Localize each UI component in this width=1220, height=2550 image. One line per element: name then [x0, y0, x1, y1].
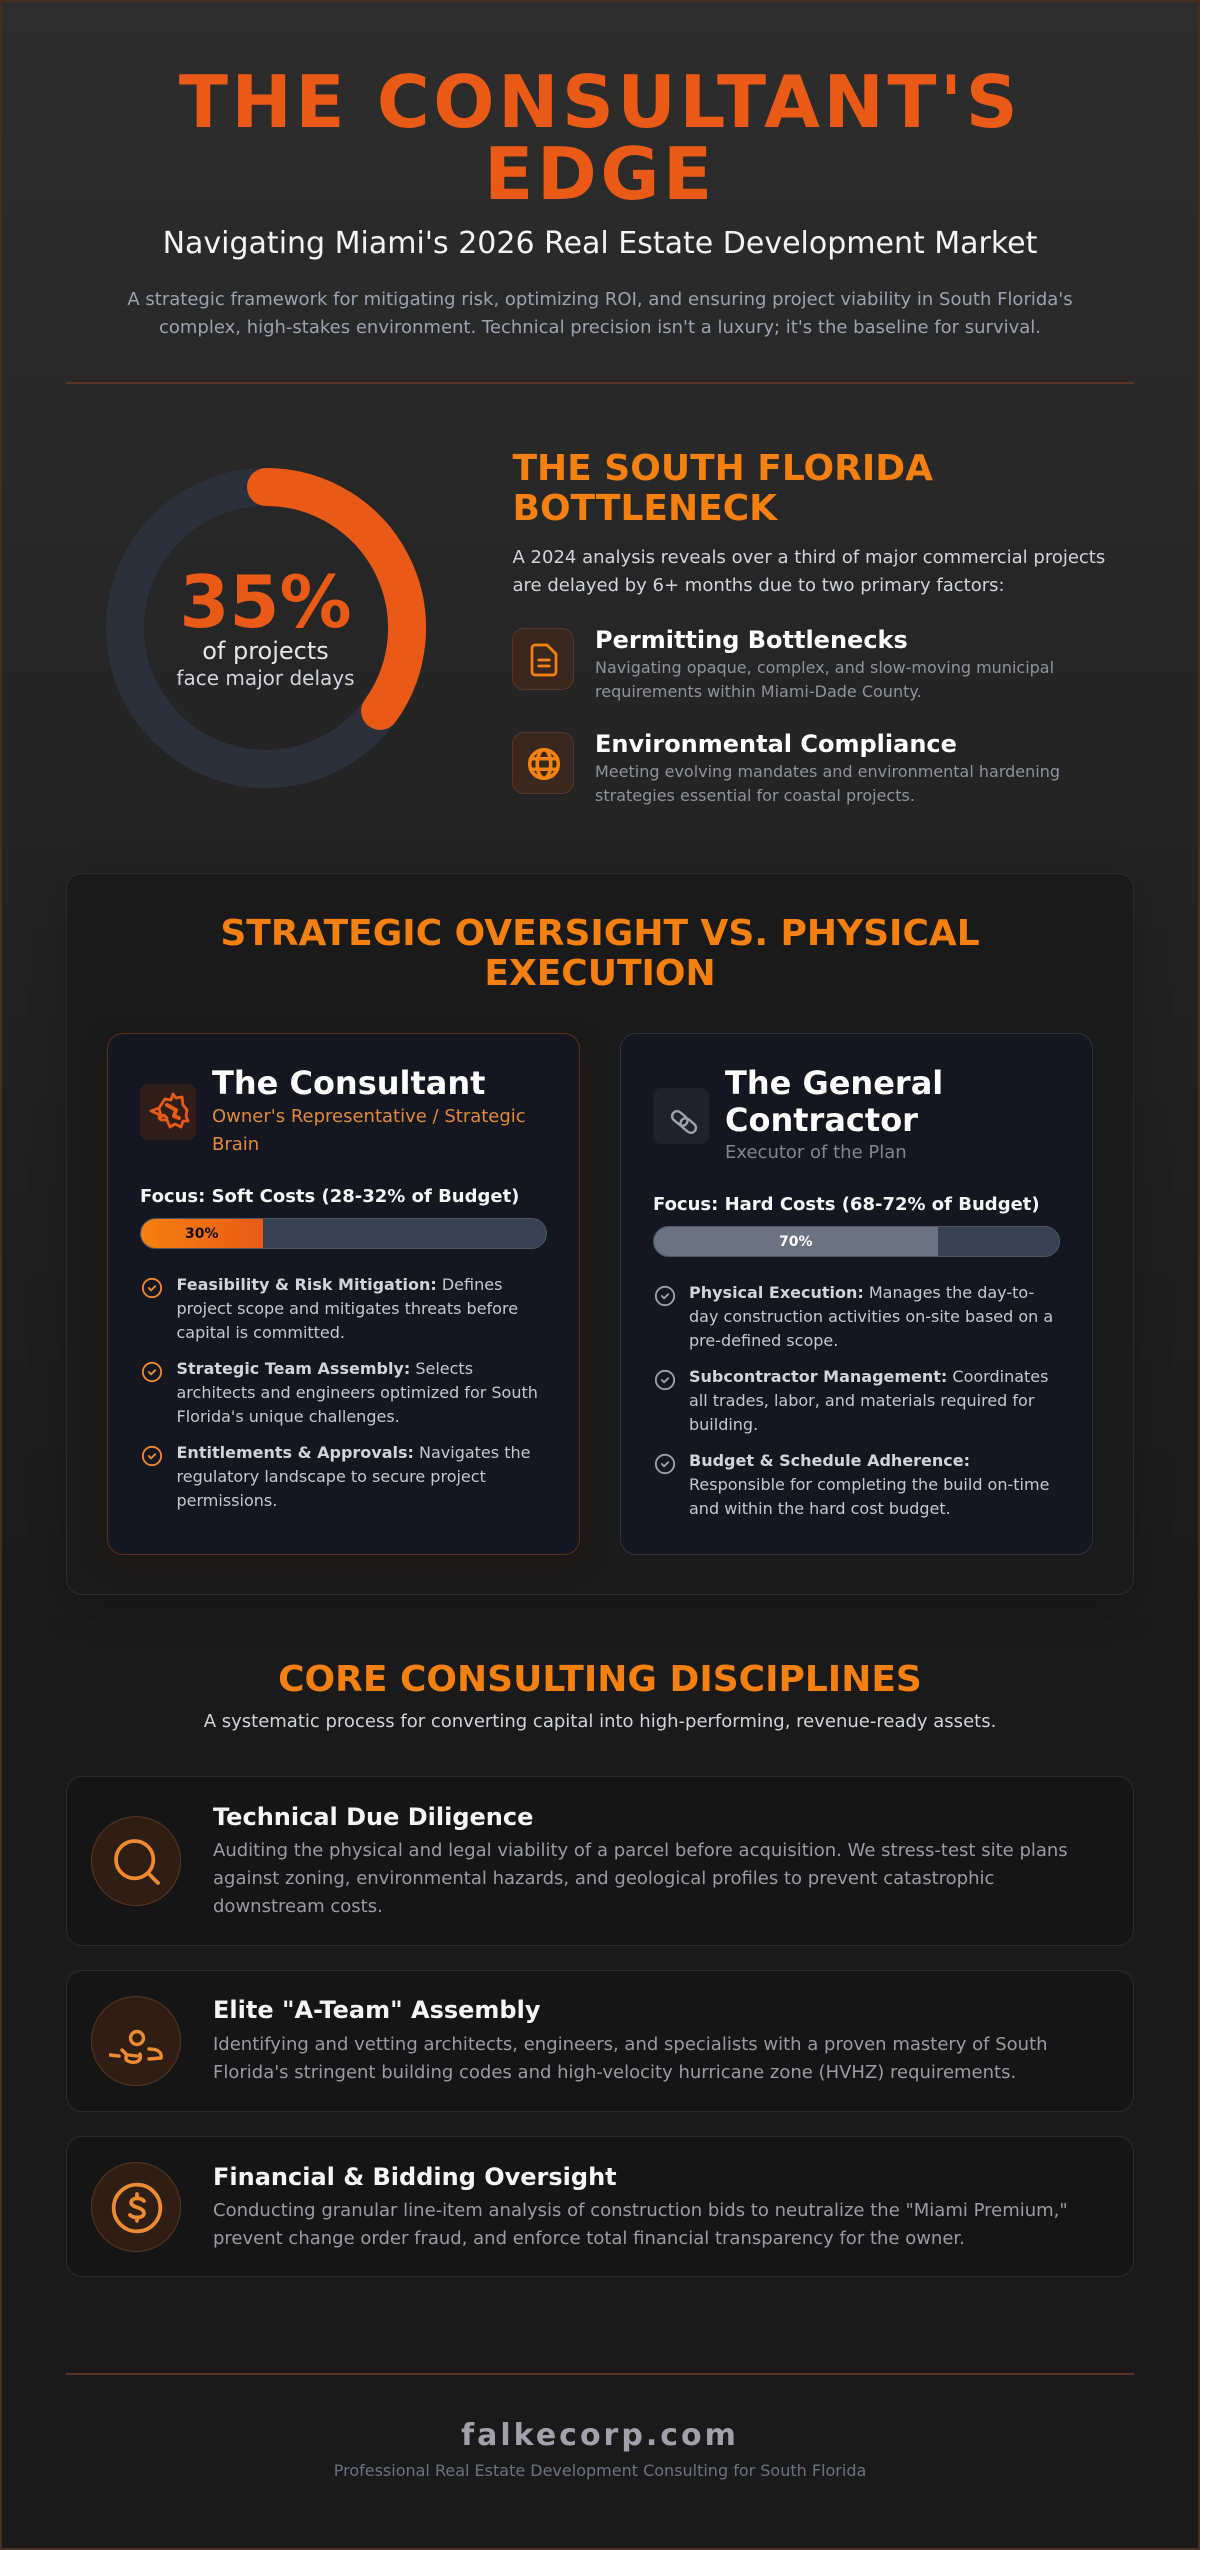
- icon: globe: [512, 732, 574, 794]
- item 2 check: [654, 1370, 676, 1390]
- card: the general contractor: [620, 1033, 1093, 1555]
- due diligence description: Auditing the physical and legal viability of a parcel before acquisition. We stress-test site plans: [213, 1840, 1068, 1861]
- compliance title: Environmental Compliance: [595, 730, 957, 758]
- item 3 text: Entitlements & Approvals: Navigates the: [176, 1443, 530, 1462]
- due diligence description: [213, 1840, 1068, 1917]
- a-team description: [213, 2034, 1048, 2083]
- a-team title: Elite "A-Team" Assembly: [213, 1996, 540, 2024]
- donut label: of projects: [202, 637, 329, 665]
- item 3 text: and within the hard cost budget.: [689, 1498, 951, 1518]
- a-team description: Identifying and vetting architects, engineers, and specialists with a proven mastery of South: [213, 2034, 1048, 2055]
- discipline card: due diligence: [66, 1776, 1134, 1946]
- item 3 check: [142, 1446, 162, 1466]
- consultant focus label: Focus: Soft Costs (28-32% of Budget): [140, 1186, 519, 1207]
- item 1 text: Physical Execution: Manages the day-to-: [689, 1282, 1034, 1302]
- item 2 text: all trades, labor, and materials required for: [689, 1390, 1034, 1410]
- contractor icon: link: [653, 1088, 709, 1144]
- item 3 text: regulatory landscape to secure project: [176, 1467, 486, 1486]
- financial description: Conducting granular line-item analysis of construction bids to neutralize the "Miami Premium,": [213, 2200, 1068, 2221]
- panel heading: [220, 913, 980, 994]
- contractor focus label: Focus: Hard Costs (68-72% of Budget): [653, 1194, 1040, 1215]
- contractor title: The General: [725, 1064, 943, 1102]
- card: the consultant: [107, 1033, 580, 1555]
- financial description: prevent change order fraud, and enforce total financial transparency for the owner.: [213, 2228, 965, 2249]
- icon: magnifier: [91, 1816, 181, 1906]
- footer tagline: Professional Real Estate Development Consulting for South Florida: [334, 2461, 866, 2480]
- heading: bottleneck: [512, 448, 933, 529]
- item 3 text: [689, 1450, 1049, 1518]
- consultant subtitle: [212, 1106, 526, 1154]
- compliance description: Meeting evolving mandates and environmental hardening: [595, 762, 1060, 780]
- item 2 text: architects and engineers optimized for South: [176, 1383, 538, 1402]
- item 1 check: [654, 1286, 676, 1306]
- title: THE CONSULTANT'S: [179, 60, 1021, 144]
- consultant icon: brain: [140, 1084, 196, 1140]
- item 2 text: [176, 1359, 538, 1426]
- permitting description: requirements within Miami-Dade County.: [595, 682, 922, 700]
- item 3 check: [654, 1454, 676, 1474]
- consultant progress bar: [140, 1218, 547, 1249]
- donut chart: 35% of projects: [106, 468, 426, 788]
- intro text: [127, 288, 1073, 338]
- item 1 text: Feasibility & Risk Mitigation: Defines: [176, 1275, 502, 1294]
- panel heading: STRATEGIC OVERSIGHT VS. PHYSICAL: [220, 913, 980, 954]
- panel: strategic oversight vs physical execution: [66, 873, 1134, 1595]
- item 1 text: day construction activities on-site based on a: [689, 1306, 1053, 1326]
- item 2 text: Subcontractor Management: Coordinates: [689, 1366, 1048, 1386]
- item 3 text: Responsible for completing the build on-time: [689, 1474, 1049, 1494]
- footer brand: falkecorp.com: [461, 2418, 739, 2453]
- contractor subtitle: Executor of the Plan: [725, 1142, 907, 1163]
- item 1 text: [176, 1275, 518, 1342]
- consultant subtitle: Owner's Representative / Strategic: [212, 1106, 526, 1126]
- compliance description: strategies essential for coastal projects.: [595, 786, 915, 804]
- contractor progress bar: [653, 1226, 1060, 1257]
- discipline card: a-team: [66, 1970, 1134, 2112]
- donut sublabel: face major delays: [176, 666, 355, 690]
- panel heading: EXECUTION: [484, 953, 716, 994]
- intro text: A strategic framework for mitigating risk, optimizing ROI, and ensuring project viability in South Florida's: [127, 288, 1073, 310]
- header: [127, 60, 1073, 338]
- donut value: 35%: [179, 560, 352, 644]
- permitting description: [595, 658, 1054, 700]
- subtitle: Navigating Miami's 2026 Real Estate Development Market: [163, 226, 1037, 261]
- consultant title: The Consultant: [212, 1064, 485, 1102]
- item 3 text: permissions.: [176, 1491, 277, 1510]
- icon: dollar: [91, 2162, 181, 2252]
- due diligence title: Technical Due Diligence: [213, 1803, 533, 1831]
- financial title: Financial & Bidding Oversight: [213, 2162, 617, 2190]
- item 1 text: project scope and mitigates threats before: [176, 1299, 518, 1318]
- item 2 text: [689, 1366, 1048, 1434]
- item 1 text: [689, 1282, 1053, 1350]
- due diligence description: downstream costs.: [213, 1896, 383, 1917]
- consultant list: [142, 1275, 538, 1510]
- permitting description: Navigating opaque, complex, and slow-moving municipal: [595, 658, 1054, 676]
- permitting title: Permitting Bottlenecks: [595, 626, 908, 654]
- item 3 text: [176, 1443, 530, 1510]
- item 1 text: pre-defined scope.: [689, 1330, 838, 1350]
- compliance description: [595, 762, 1060, 804]
- consultant progress bar: 30%: [185, 1226, 218, 1242]
- icon: team: [91, 1996, 181, 2086]
- heading: core disciplines: CORE CONSULTING DISCIPLINES: [278, 1659, 922, 1700]
- item 2 text: Strategic Team Assembly: Selects: [176, 1359, 473, 1378]
- heading: bottleneck: BOTTLENECK: [512, 488, 777, 529]
- a-team description: Florida's stringent building codes and high-velocity hurricane zone (HVHZ) requirements.: [213, 2062, 1016, 2083]
- contractor progress bar: 70%: [779, 1234, 812, 1250]
- item 2 text: building.: [689, 1414, 758, 1434]
- item 2 check: [142, 1362, 162, 1382]
- consultant subtitle: Brain: [212, 1134, 259, 1154]
- item 1 text: capital is committed.: [176, 1323, 345, 1342]
- core disciplines subheading: A systematic process for converting capital into high-performing, revenue-ready assets.: [204, 1711, 996, 1732]
- bottleneck text: A 2024 analysis reveals over a third of major commercial projects: [512, 547, 1105, 568]
- title: EDGE: [484, 132, 716, 216]
- icon: permitting document: [512, 628, 574, 690]
- item 1 check: [142, 1278, 162, 1298]
- title: [179, 60, 1021, 216]
- discipline card: financial: [66, 2136, 1134, 2277]
- contractor title: [725, 1064, 943, 1139]
- bottleneck text: [512, 547, 1105, 596]
- item 3 text: Budget & Schedule Adherence:: [689, 1450, 970, 1470]
- heading: bottleneck: THE SOUTH FLORIDA: [512, 448, 933, 489]
- contractor title: Contractor: [725, 1101, 918, 1139]
- due diligence description: against zoning, environmental hazards, and geological profiles to prevent catastrophic: [213, 1868, 994, 1889]
- intro text: complex, high-stakes environment. Technical precision isn't a luxury; it's the baseline for survival.: [159, 316, 1041, 338]
- financial description: [213, 2200, 1068, 2249]
- bottleneck text: are delayed by 6+ months due to two primary factors:: [512, 575, 1005, 596]
- contractor list: [654, 1282, 1053, 1518]
- item 2 text: Florida's unique challenges.: [176, 1407, 400, 1426]
